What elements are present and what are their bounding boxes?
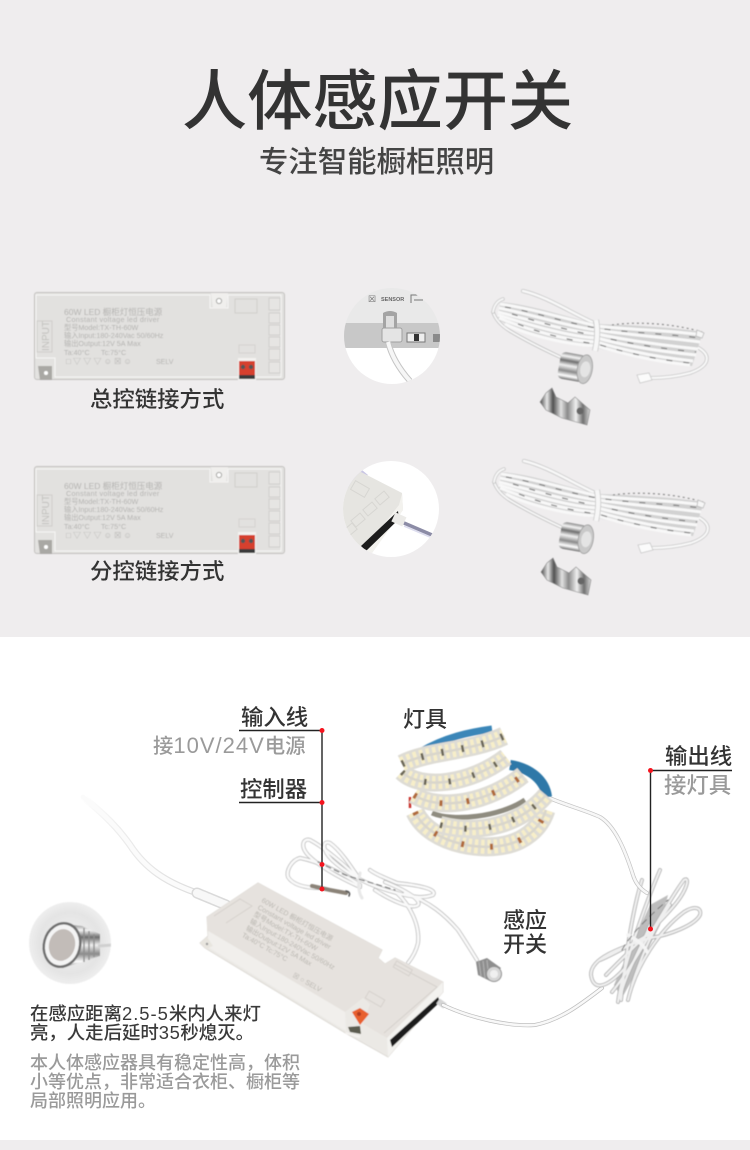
icon: small sensor head: [476, 958, 502, 982]
icon: master connection close-up: SENSOR: [381, 297, 404, 303]
callout: output wire: 接灯具: [664, 773, 731, 798]
panel: master connection driver: [34, 292, 285, 380]
panel: branch connection driver: □ ▽ ▽ ▽ ☺ ☒ ☺: [66, 531, 132, 540]
controller unit: [200, 883, 445, 1057]
controller unit: 60W LED 橱柜灯恒压电源: [260, 896, 335, 943]
panel: master connection driver: 60W LED 橱柜灯恒压电源: [64, 307, 163, 317]
panel: master connection driver: INPUT: [41, 321, 52, 351]
controller unit: 型号Model:TX-TH-60W: [252, 910, 320, 953]
panel: branch connection driver: Tc:75°C: [101, 522, 126, 531]
panel: master connection driver: □ ▽ ▽ ▽ ☺ ☒ ☺: [66, 357, 132, 366]
icon: sensor cable and clip, row one: [493, 291, 707, 425]
panel: master connection driver: Tc:75°C: [101, 348, 126, 357]
text block: sensing description: [30, 1003, 261, 1043]
panel: branch connection driver: 型号Model:TX-TH-60W: [64, 497, 138, 506]
panel: master connection driver: 输出Output:12V 5A Max: [64, 339, 141, 348]
icon: master connection close-up: ☒: [368, 294, 376, 304]
panel: branch connection driver: SELV: [156, 533, 174, 540]
label: sensor switch: 开关: [503, 932, 547, 957]
output cable bundle: [591, 870, 700, 1002]
text block: sensing description: 亮，人走后延时35秒熄灭。: [30, 1022, 254, 1043]
text block: product description: 局部照明应用。: [30, 1090, 156, 1111]
icon: master connection close-up: [344, 288, 440, 384]
control cable bundle: [288, 840, 477, 963]
panel: master connection driver: SELV: [156, 359, 174, 366]
title: 人体感应开关: [182, 65, 573, 138]
text block: product description: [30, 1052, 300, 1111]
label: fixture: 灯具: [403, 707, 447, 732]
panel: master connection driver: 输入Input:180-240Vac 50/60Hz: [64, 331, 164, 340]
panel: branch connection driver: Ta:40°C: [64, 522, 90, 531]
mains cable: [83, 797, 226, 905]
callout: input wire: 输入线: [241, 705, 308, 730]
panel: white wiring diagram: [0, 637, 750, 1140]
panel: branch connection driver: INPUT: [41, 495, 52, 525]
icon: branch connection close-up: [343, 461, 439, 557]
label: sensor switch: 感应: [503, 908, 547, 933]
panel: branch connection driver: 输入Input:180-240Vac 50/60Hz: [64, 505, 164, 514]
controller unit: 输入Input:180-240Vac 50/60Hz: [248, 917, 337, 972]
callout: output wire: [648, 744, 732, 932]
caption: master connection: 总控链接方式: [90, 387, 224, 412]
text block: sensing description: 在感应距离2.5-5米内人来灯: [30, 1003, 261, 1024]
callout: input wire: 接10V/24V电源: [153, 733, 306, 758]
panel: master connection driver: 型号Model:TX-TH-60W: [64, 323, 138, 332]
top panel background: [0, 0, 750, 637]
callout: input wire: [153, 705, 324, 889]
bottom strip: [0, 1140, 750, 1150]
controller unit: 输出Output:12V 5A Max: [244, 923, 314, 968]
subtitle: 专注智能橱柜照明: [259, 146, 494, 179]
panel: branch connection driver: 输出Output:12V 5A Max: [64, 513, 141, 522]
output cable: [443, 988, 602, 1025]
panel: branch connection driver: [34, 466, 285, 554]
panel: branch connection driver: Constant voltage led driver: [66, 489, 160, 498]
icon: sensor cable and clip, row two: [494, 461, 708, 595]
icon: sensor close-up bubble: [29, 902, 112, 984]
panel: master connection driver: Ta:40°C: [64, 348, 90, 357]
caption: branch connection: 分控链接方式: [90, 559, 224, 584]
callout: controller: 控制器: [240, 777, 307, 802]
controller unit: Ta:40°C Tc:75°C: [240, 931, 289, 963]
wire from LED strip: [547, 797, 647, 893]
LED strip: [402, 729, 547, 847]
text block: product description: 本人体感应器具有稳定性高，体积: [30, 1052, 300, 1073]
callout: controller: [239, 777, 324, 892]
controller unit: Constant voltage led driver: [256, 904, 332, 951]
panel: branch connection driver: 60W LED 橱柜灯恒压电源: [64, 481, 163, 491]
controller unit: ☒ ○ SELV: [291, 971, 323, 994]
panel: master connection driver: Constant voltage led driver: [66, 315, 160, 324]
label: sensor switch: [503, 908, 547, 957]
callout: output wire: 输出线: [665, 744, 732, 769]
text block: product description: 小等优点，非常适合衣柜、橱柜等: [30, 1072, 300, 1092]
